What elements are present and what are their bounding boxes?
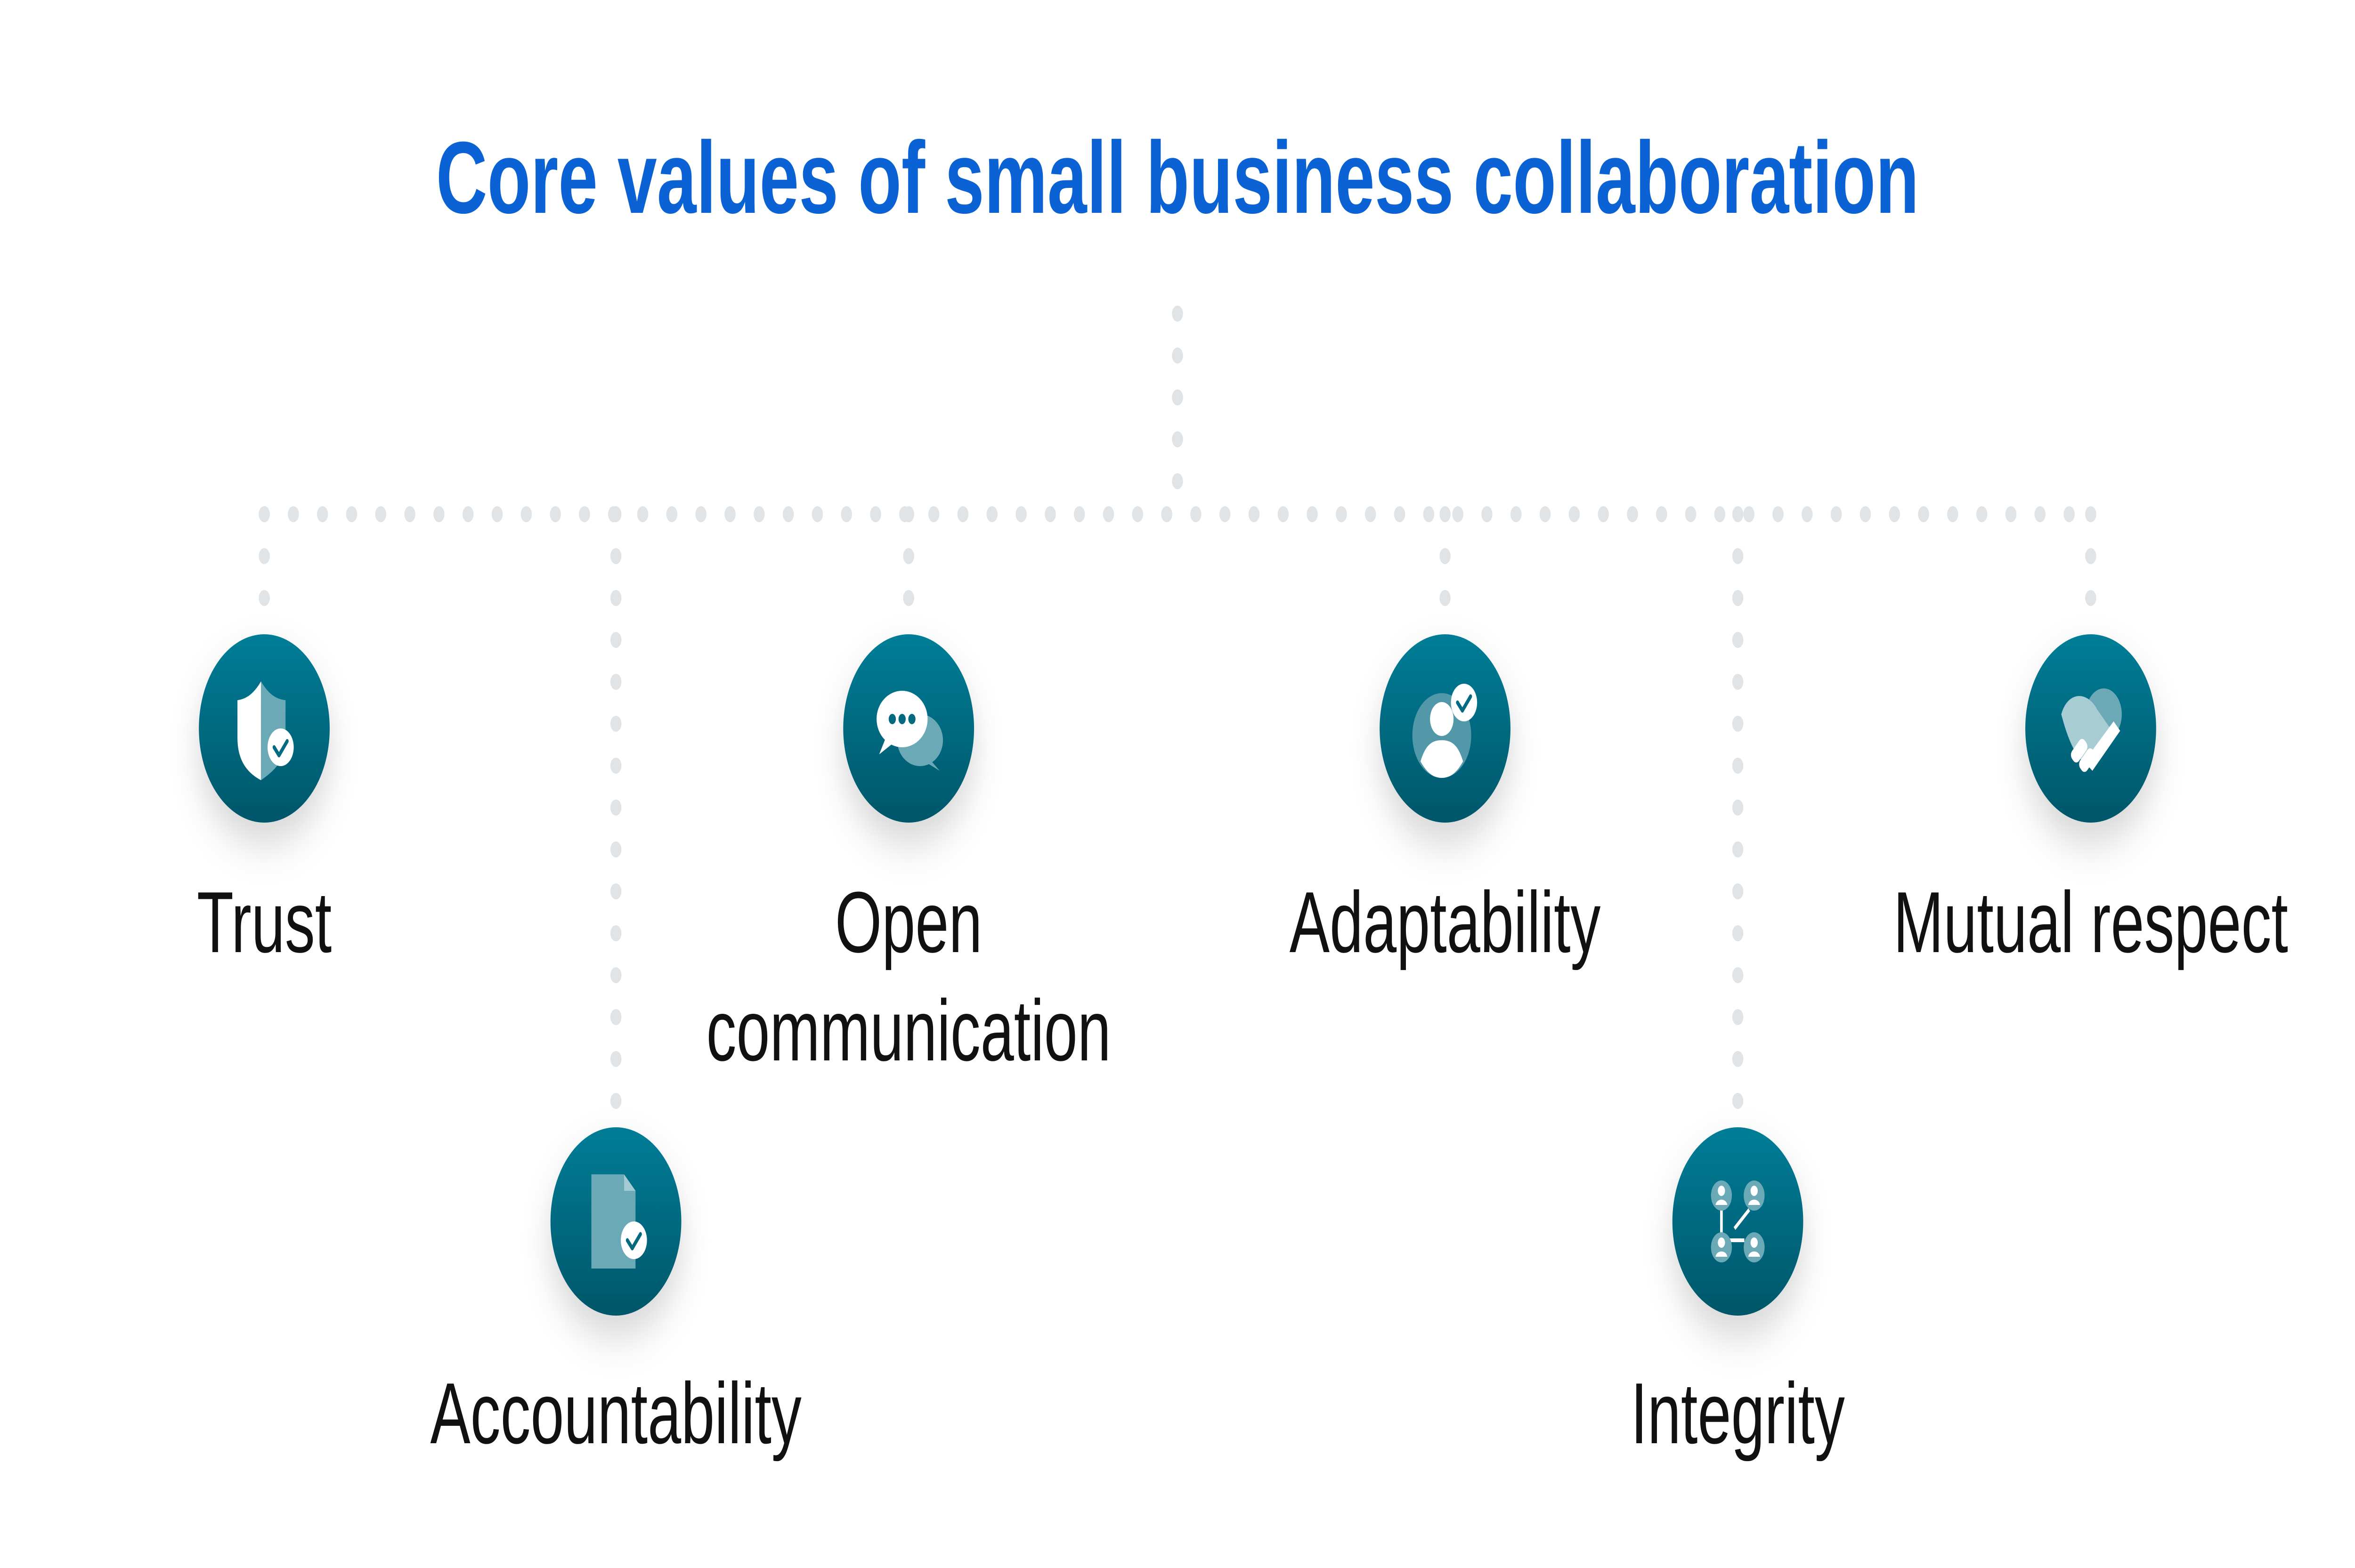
icon: mutual respect handshake	[2025, 634, 2156, 823]
label: integrity: Integrity	[1631, 1365, 1845, 1462]
label: open communication: communication	[706, 982, 1111, 1079]
label: adaptability: Adaptability	[1290, 874, 1600, 970]
labels	[197, 874, 2288, 1462]
label: open communication: Open	[835, 874, 982, 970]
label: trust: Trust	[197, 874, 332, 970]
icon: accountability document	[551, 1127, 682, 1316]
label: accountability: Accountability	[430, 1365, 802, 1462]
label: mutual respect: Mutual respect	[1893, 874, 2288, 970]
connector lines	[264, 314, 2091, 1125]
icon: adaptability person	[1380, 634, 1510, 823]
icon: integrity network	[1673, 1127, 1803, 1316]
icon: open communication chat	[843, 634, 974, 823]
icon: trust shield	[199, 634, 330, 823]
title: Core values of small business collaboration	[436, 121, 1919, 234]
